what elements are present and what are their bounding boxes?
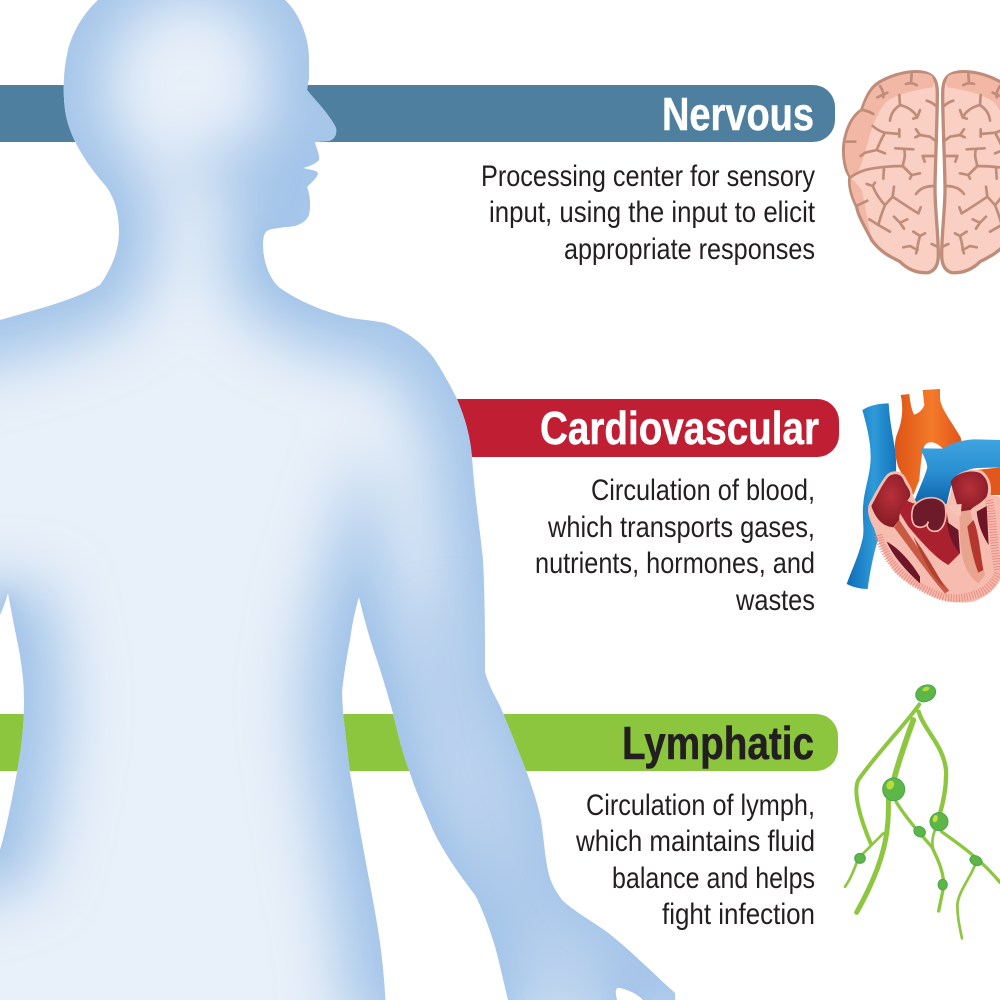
text: lymphatic description — [575, 789, 815, 931]
text: lymphatic description: Circulation of lymph, — [586, 789, 815, 822]
text: cardiovascular description: wastes — [735, 584, 815, 617]
heading: Nervous: Nervous — [662, 88, 814, 140]
text: cardiovascular description: which transports gases, — [547, 511, 815, 544]
text: nervous description: input, using the input to elicit — [489, 196, 815, 229]
human body silhouette — [0, 0, 676, 1000]
heading: Lymphatic: Lymphatic — [622, 717, 814, 769]
text: cardiovascular description: Circulation of blood, — [591, 474, 815, 507]
banner: lymphatic — [0, 714, 838, 771]
heading: Cardiovascular: Cardiovascular — [540, 402, 819, 454]
text: cardiovascular description: nutrients, hormones, and — [535, 547, 815, 580]
text: lymphatic description: balance and helps — [612, 862, 815, 895]
text: lymphatic description: fight infection — [662, 898, 815, 931]
text: nervous description — [481, 160, 815, 266]
icon: brain — [844, 72, 1000, 273]
text: cardiovascular description — [535, 474, 815, 617]
icon: heart — [847, 389, 1000, 603]
banner: nervous — [0, 85, 835, 142]
text: lymphatic description: which maintains fluid — [575, 825, 815, 858]
icon: lymph vessels — [845, 682, 1000, 938]
text: nervous description: appropriate responses — [564, 233, 815, 266]
banner: cardiovascular — [440, 399, 839, 457]
text: nervous description: Processing center for sensory — [481, 160, 815, 193]
